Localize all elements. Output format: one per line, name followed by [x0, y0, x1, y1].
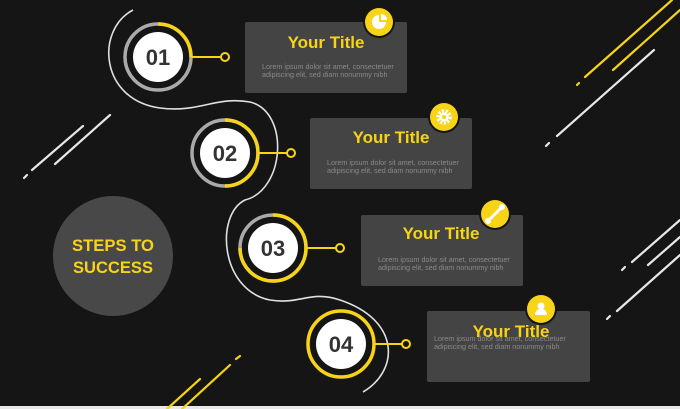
box 1: Your Title	[288, 33, 364, 52]
box 4: adipiscing elit, sed diam nonummy nibh	[434, 342, 559, 351]
center circle: steps to success: SUCCESS	[73, 258, 153, 277]
step 04: 04	[329, 332, 354, 357]
box 2: Your Title	[353, 128, 429, 147]
box 1: Lorem ipsum dolor sit amet, consectetuer	[262, 62, 394, 71]
box 4: Lorem ipsum dolor sit amet, consectetuer	[434, 334, 566, 343]
step 01	[125, 24, 229, 90]
center circle: steps to success: STEPS TO	[72, 236, 154, 255]
box 1: adipiscing elit, sed diam nonummy nibh	[262, 70, 387, 79]
box 1	[245, 6, 407, 93]
step 02: 02	[213, 141, 237, 166]
step 03: 03	[261, 236, 285, 261]
box 2	[310, 101, 472, 189]
step 02	[192, 120, 295, 186]
center circle: steps to success	[53, 196, 173, 316]
step 01: 01	[146, 45, 170, 70]
box 3: adipiscing elit, sed diam nonummy nibh	[378, 263, 503, 272]
box 3: Lorem ipsum dolor sit amet, consectetuer	[378, 255, 510, 264]
step 04	[308, 311, 410, 377]
box 3: Your Title	[403, 224, 479, 243]
box 4: Your Title	[473, 322, 549, 341]
step 03	[240, 215, 344, 281]
box 4	[427, 293, 590, 382]
box 3	[361, 198, 523, 286]
box 2: adipiscing elit, sed diam nonummy nibh	[327, 166, 452, 175]
box 2: Lorem ipsum dolor sit amet, consectetuer	[327, 158, 459, 167]
curved path	[109, 10, 388, 392]
